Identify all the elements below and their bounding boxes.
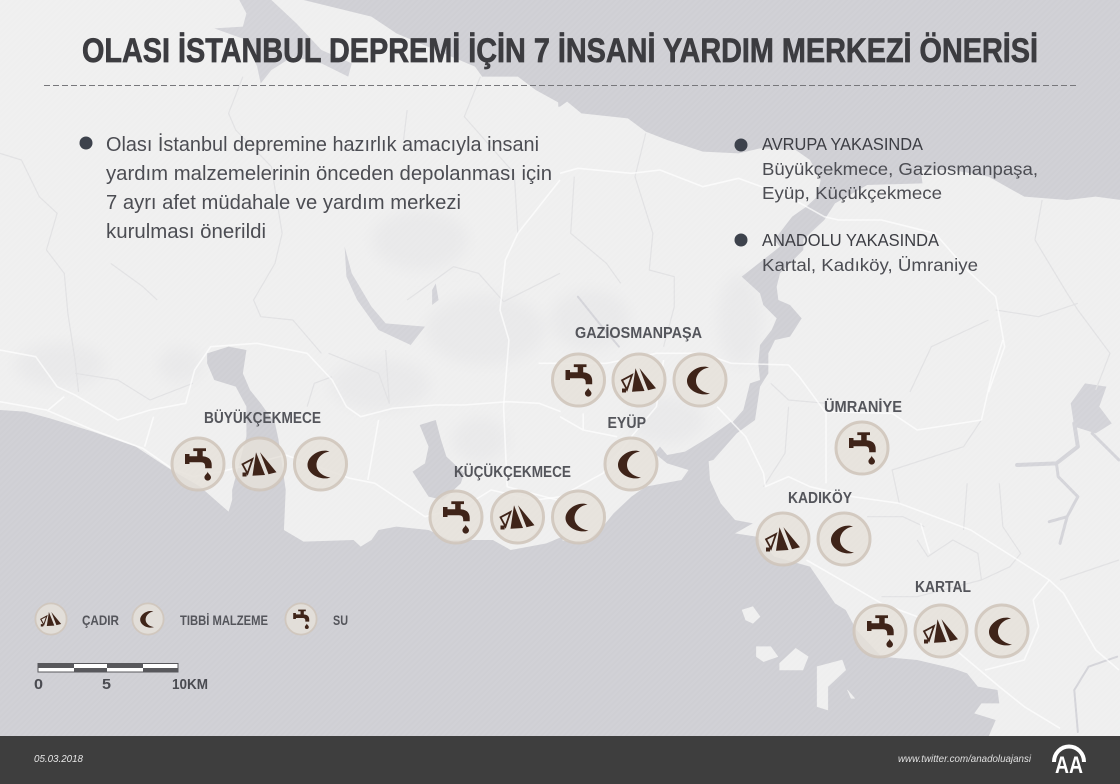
European side districts: Büyükçekmece, Gaziosmanpaşa, xyxy=(762,159,1038,179)
marker: Kartal xyxy=(854,579,1028,657)
bullet xyxy=(80,136,92,150)
footer bar xyxy=(0,736,1120,784)
marker: Eyüp xyxy=(605,415,657,490)
bullet xyxy=(734,234,748,246)
darker land patches xyxy=(15,210,762,462)
legend icon: medical xyxy=(132,603,164,635)
Anatolian side list xyxy=(734,230,978,275)
icon: tent xyxy=(757,513,809,565)
date: 05.03.2018 xyxy=(34,753,83,765)
label: BÜYÜKÇEKMECE xyxy=(204,410,321,427)
Anatolian side districts: Kartal, Kadıköy, Ümraniye xyxy=(762,255,978,275)
Bosphorus xyxy=(700,240,803,463)
label: EYÜP xyxy=(608,415,646,432)
icon: water xyxy=(552,354,604,406)
marker: Ümraniye xyxy=(824,399,902,474)
icon: medical xyxy=(976,605,1028,657)
scale labels xyxy=(34,676,208,693)
scale labels: 0 xyxy=(34,676,43,693)
marker: Kadıköy xyxy=(757,490,870,565)
Princes' Islands xyxy=(742,607,855,710)
bullet xyxy=(734,138,748,152)
icon: tent xyxy=(492,491,544,543)
legend xyxy=(35,603,348,635)
icon: water xyxy=(854,605,906,657)
label: GAZİOSMANPAŞA xyxy=(575,325,702,342)
icon: water xyxy=(172,438,224,490)
label: KARTAL xyxy=(915,579,971,596)
label: ÜMRANİYE xyxy=(824,399,902,416)
logo: Anadolu Agency xyxy=(1054,746,1084,779)
marker: Gaziosmanpaşa xyxy=(552,325,726,406)
icon: medical xyxy=(605,438,657,490)
icon: medical xyxy=(294,438,346,490)
European side list xyxy=(734,134,1038,203)
icon: water xyxy=(836,422,888,474)
European side districts: Eyüp, Küçükçekmece xyxy=(762,183,942,203)
European side heading: AVRUPA YAKASINDA xyxy=(762,134,923,154)
district borders xyxy=(0,77,1119,597)
scale bar xyxy=(34,664,208,693)
label: KÜÇÜKÇEKMECE xyxy=(454,464,571,481)
Anatolian side heading: ANADOLU YAKASINDA xyxy=(762,230,939,250)
marker: Küçükçekmece xyxy=(430,464,604,543)
legend label: medical: TIBBİ MALZEME xyxy=(180,612,268,628)
icon: water xyxy=(430,491,482,543)
legend icon: tent xyxy=(35,603,67,635)
intro paragraph: yardım malzemelerinin önceden depolanması için xyxy=(106,162,552,185)
intro paragraph: Olası İstanbul depremine hazırlık amacıyla insani xyxy=(106,133,539,156)
intro paragraph: kurulması önerildi xyxy=(106,220,266,243)
scale labels: 5 xyxy=(102,676,111,693)
twitter address: www.twitter.com/anadoluajansi xyxy=(898,753,1032,765)
icon: tent xyxy=(613,354,665,406)
highways xyxy=(0,168,1119,728)
scale graphic xyxy=(38,664,178,672)
legend icon: water xyxy=(285,603,317,635)
Marmara Sea and lagoons xyxy=(0,347,999,737)
legend label: tent: ÇADIR xyxy=(82,612,119,628)
logo: Anadolu Agency: AA xyxy=(1055,752,1083,779)
icon: tent xyxy=(915,605,967,657)
intro paragraph: 7 ayrı afet müdahale ve yardım merkezi xyxy=(106,191,461,214)
legend label: water: SU xyxy=(333,612,348,628)
icon: medical xyxy=(674,354,726,406)
inland lakes xyxy=(214,0,1112,433)
icon: tent xyxy=(234,438,286,490)
marker: Büyükçekmece xyxy=(172,410,346,490)
label: KADIKÖY xyxy=(788,490,853,507)
Black Sea xyxy=(304,0,1120,463)
icon: medical xyxy=(552,491,604,543)
icon: medical xyxy=(818,513,870,565)
scale labels: 10KM xyxy=(172,676,208,693)
intro text block xyxy=(80,133,552,243)
